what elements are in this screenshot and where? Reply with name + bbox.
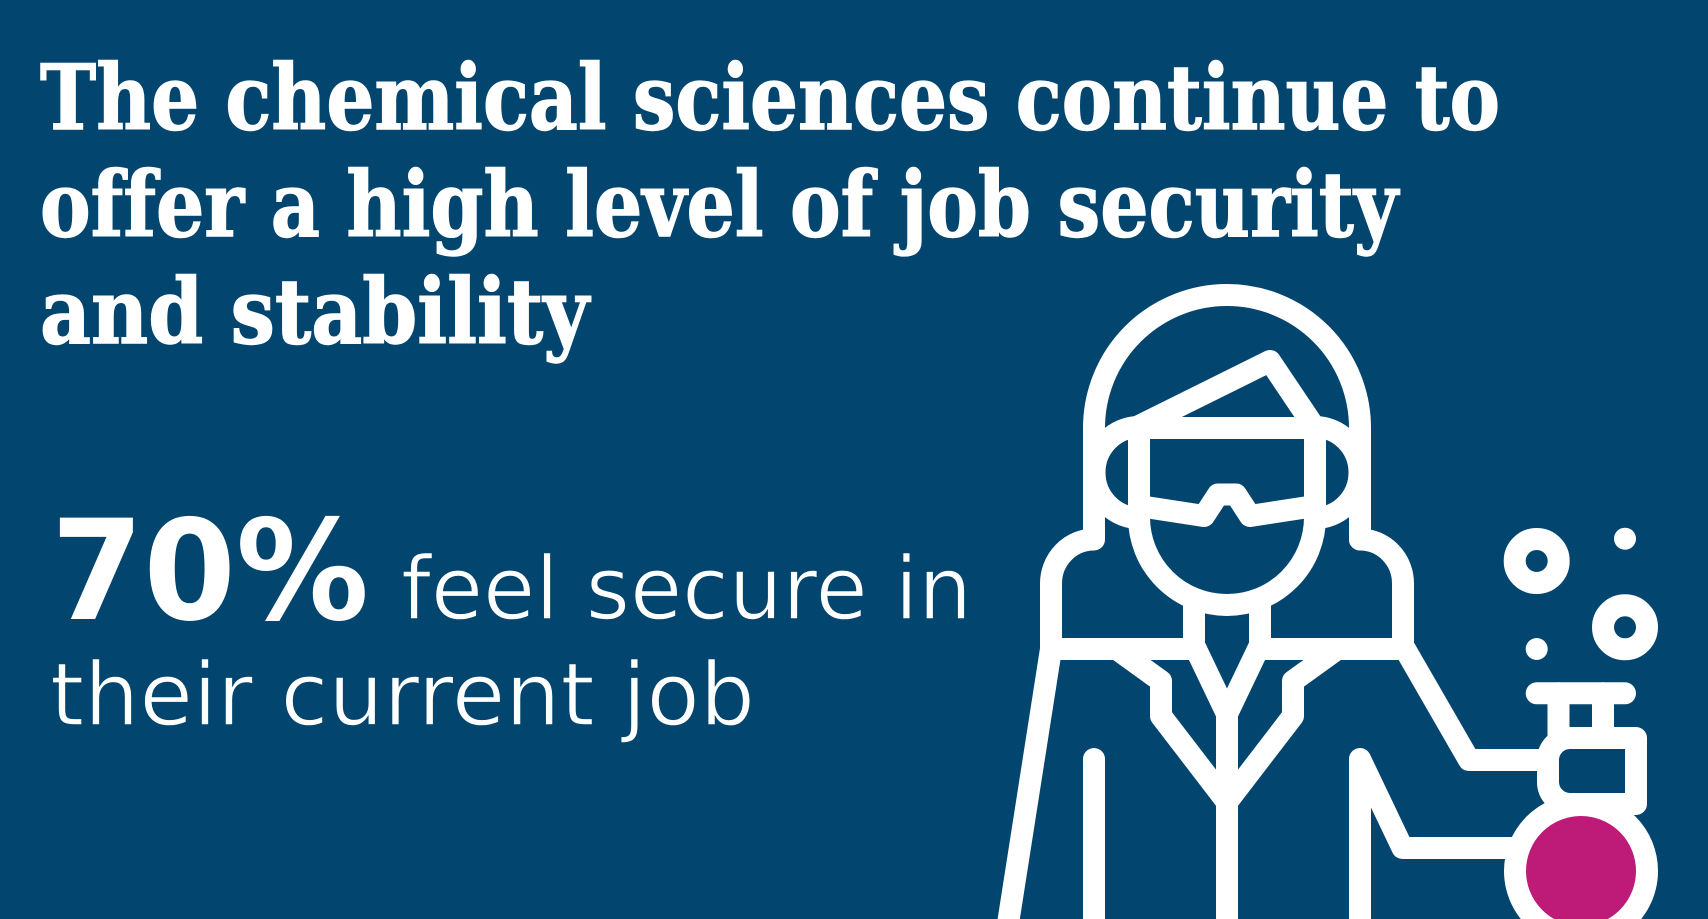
right arm lower bbox=[1360, 759, 1512, 919]
neck and shirt V bbox=[1194, 600, 1260, 714]
hood, shoulders and coat left edge bbox=[1007, 295, 1360, 919]
stat: 70%: 70% bbox=[51, 490, 369, 652]
flask neck bbox=[1558, 693, 1603, 738]
goggle straps bbox=[1094, 427, 1360, 518]
flask bbox=[1515, 693, 1647, 919]
bubble ring 1 bbox=[1515, 539, 1559, 583]
icon: scientist with goggles holding a flask bbox=[1007, 295, 1647, 919]
face bbox=[1139, 517, 1315, 605]
lapels bbox=[1118, 650, 1336, 802]
flask holder bbox=[1548, 738, 1636, 804]
stat caption line 2: their current job bbox=[50, 644, 755, 746]
title: and stability bbox=[40, 259, 591, 365]
collar line left bbox=[1051, 638, 1194, 660]
bubble dot 2 bbox=[1526, 638, 1548, 660]
hood right shoulder bbox=[1360, 540, 1403, 649]
bubble dot 1 bbox=[1614, 528, 1636, 550]
flask bulb liquid bbox=[1515, 805, 1647, 919]
statistic text bbox=[50, 490, 972, 746]
bubbles bbox=[1515, 528, 1647, 660]
title bbox=[40, 45, 1500, 365]
goggles bbox=[1139, 428, 1315, 516]
fringe bbox=[1135, 361, 1315, 428]
left sleeve line bbox=[1083, 759, 1105, 919]
stat caption line 1: feel secure in bbox=[401, 538, 972, 640]
right arm upper bbox=[1405, 649, 1547, 760]
title: offer a high level of job security bbox=[40, 152, 1400, 258]
centre line bbox=[1216, 714, 1238, 919]
flask lip bbox=[1537, 682, 1625, 704]
collar line right bbox=[1260, 638, 1404, 660]
bubble ring 2 bbox=[1603, 605, 1647, 649]
